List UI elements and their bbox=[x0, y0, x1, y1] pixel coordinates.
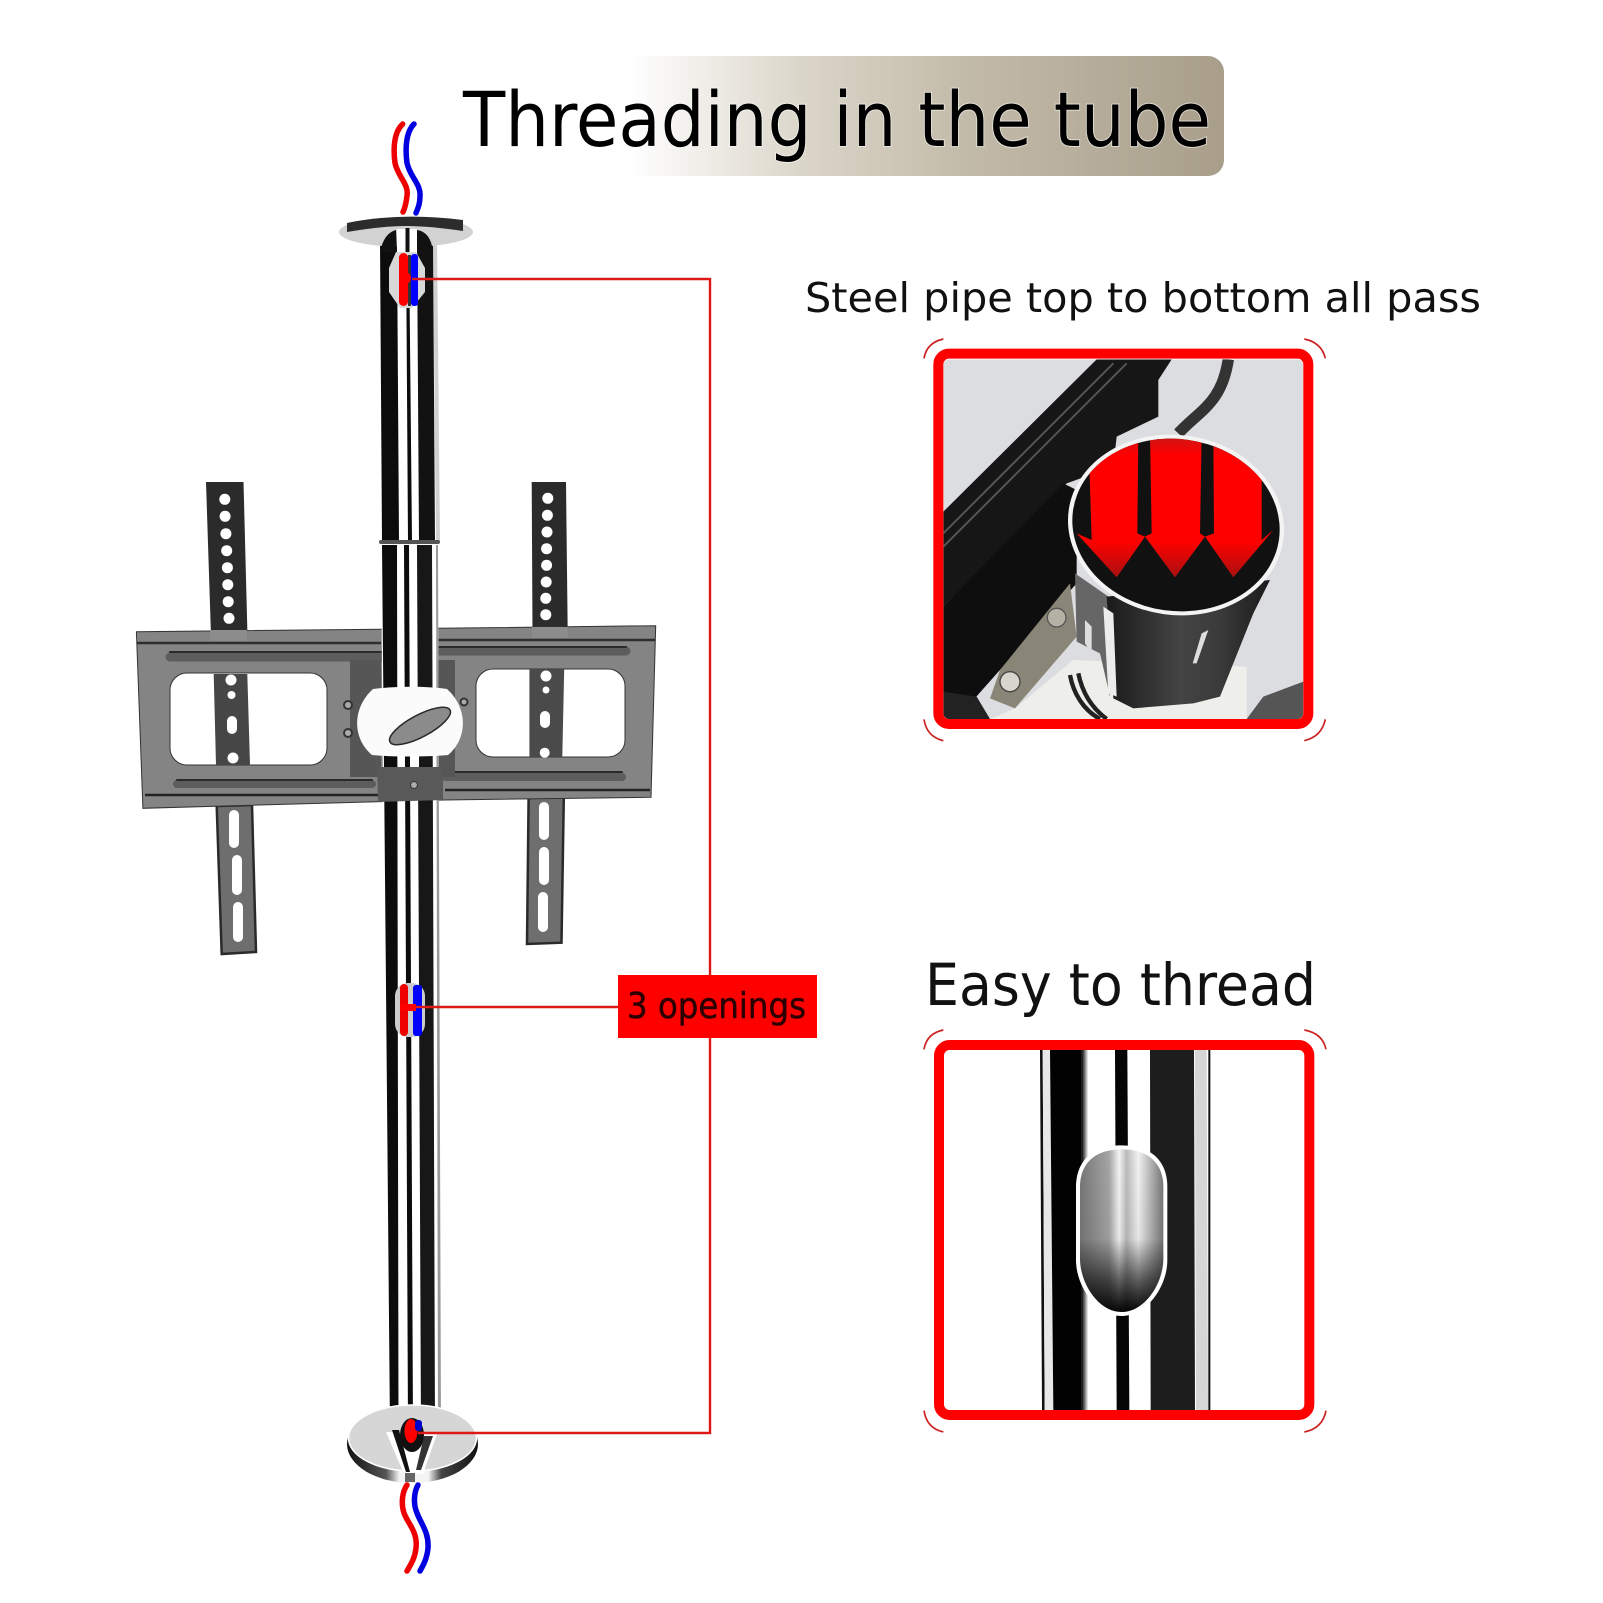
support handle bbox=[1178, 359, 1228, 433]
steel pipe bbox=[379, 240, 441, 1430]
red and blue wires: top bbox=[394, 124, 420, 213]
bracket top tabs bbox=[210, 627, 568, 641]
black back plate bbox=[943, 483, 1077, 700]
bracket strip through left window bbox=[214, 674, 250, 765]
mounting plate bbox=[136, 626, 656, 808]
central mount backing bbox=[350, 660, 455, 777]
upper tube bbox=[379, 240, 440, 542]
opening: bottom bbox=[400, 1418, 424, 1452]
red frame bbox=[938, 354, 1308, 724]
tube shoulder bbox=[380, 230, 433, 252]
pipe body bbox=[1107, 580, 1270, 708]
steel bracket bbox=[990, 583, 1077, 708]
red frame bbox=[939, 1045, 1309, 1415]
corner arcs bbox=[924, 1030, 1326, 1432]
lower tube bbox=[381, 545, 441, 1430]
corner arcs bbox=[924, 339, 1325, 741]
callout: 3 openings bbox=[618, 975, 817, 1038]
bottom flange bbox=[347, 1405, 478, 1483]
TV mount bracket bbox=[136, 482, 656, 954]
heading: steel pipe: Steel pipe top to bottom all pass bbox=[805, 274, 1481, 322]
swivel clamp bbox=[344, 687, 468, 802]
three red down arrows bbox=[1077, 433, 1273, 577]
callout: 3 openings: 3 openings bbox=[627, 986, 806, 1027]
flange pipe flare bbox=[386, 1432, 437, 1474]
upper left vertical bracket bbox=[206, 482, 248, 636]
pipe highlights bbox=[1085, 607, 1208, 697]
title background bar bbox=[630, 56, 1224, 176]
pipe mouth interior bbox=[1072, 438, 1280, 612]
bracket strip through right window bbox=[529, 669, 564, 758]
title text: Threading in the tube bbox=[462, 75, 1211, 164]
white clamp ball bbox=[357, 687, 463, 756]
plate rails bbox=[137, 640, 655, 795]
title bbox=[462, 56, 1224, 176]
dark object lower right bbox=[1247, 682, 1303, 719]
callout leader lines bbox=[412, 279, 710, 1433]
opening: top bbox=[389, 252, 425, 308]
short pipe stripes below clamp bbox=[398, 756, 419, 767]
lower left vertical bracket bbox=[217, 805, 256, 954]
pipe side chrome bbox=[1075, 573, 1113, 697]
upper right vertical bracket bbox=[532, 482, 568, 632]
heading: easy to thread: Easy to thread bbox=[925, 951, 1316, 1019]
clamp lower band bbox=[377, 767, 443, 802]
red and blue wires: bottom bbox=[402, 1485, 428, 1571]
pipe base ring bbox=[1070, 673, 1107, 719]
opening: middle bbox=[395, 983, 425, 1037]
pipe mouth ring bbox=[1068, 434, 1284, 616]
black diagonal beam bbox=[943, 359, 1172, 607]
clamp handle bbox=[385, 700, 455, 752]
panel: opening detail bbox=[924, 1030, 1326, 1432]
flange rim bbox=[347, 1405, 478, 1483]
lower right vertical bracket bbox=[527, 797, 564, 944]
clamp bolts bbox=[344, 698, 468, 737]
white floor bbox=[990, 660, 1247, 719]
pipe stripes bbox=[944, 1050, 1305, 1411]
panel: pipe top detail bbox=[924, 339, 1325, 741]
flange top face bbox=[348, 1405, 476, 1471]
photo scene bbox=[943, 359, 1303, 719]
bottom left corner bbox=[943, 692, 990, 719]
top flange bbox=[339, 217, 473, 253]
telescopic collar bbox=[379, 540, 440, 544]
capsule opening bbox=[1076, 1145, 1167, 1316]
